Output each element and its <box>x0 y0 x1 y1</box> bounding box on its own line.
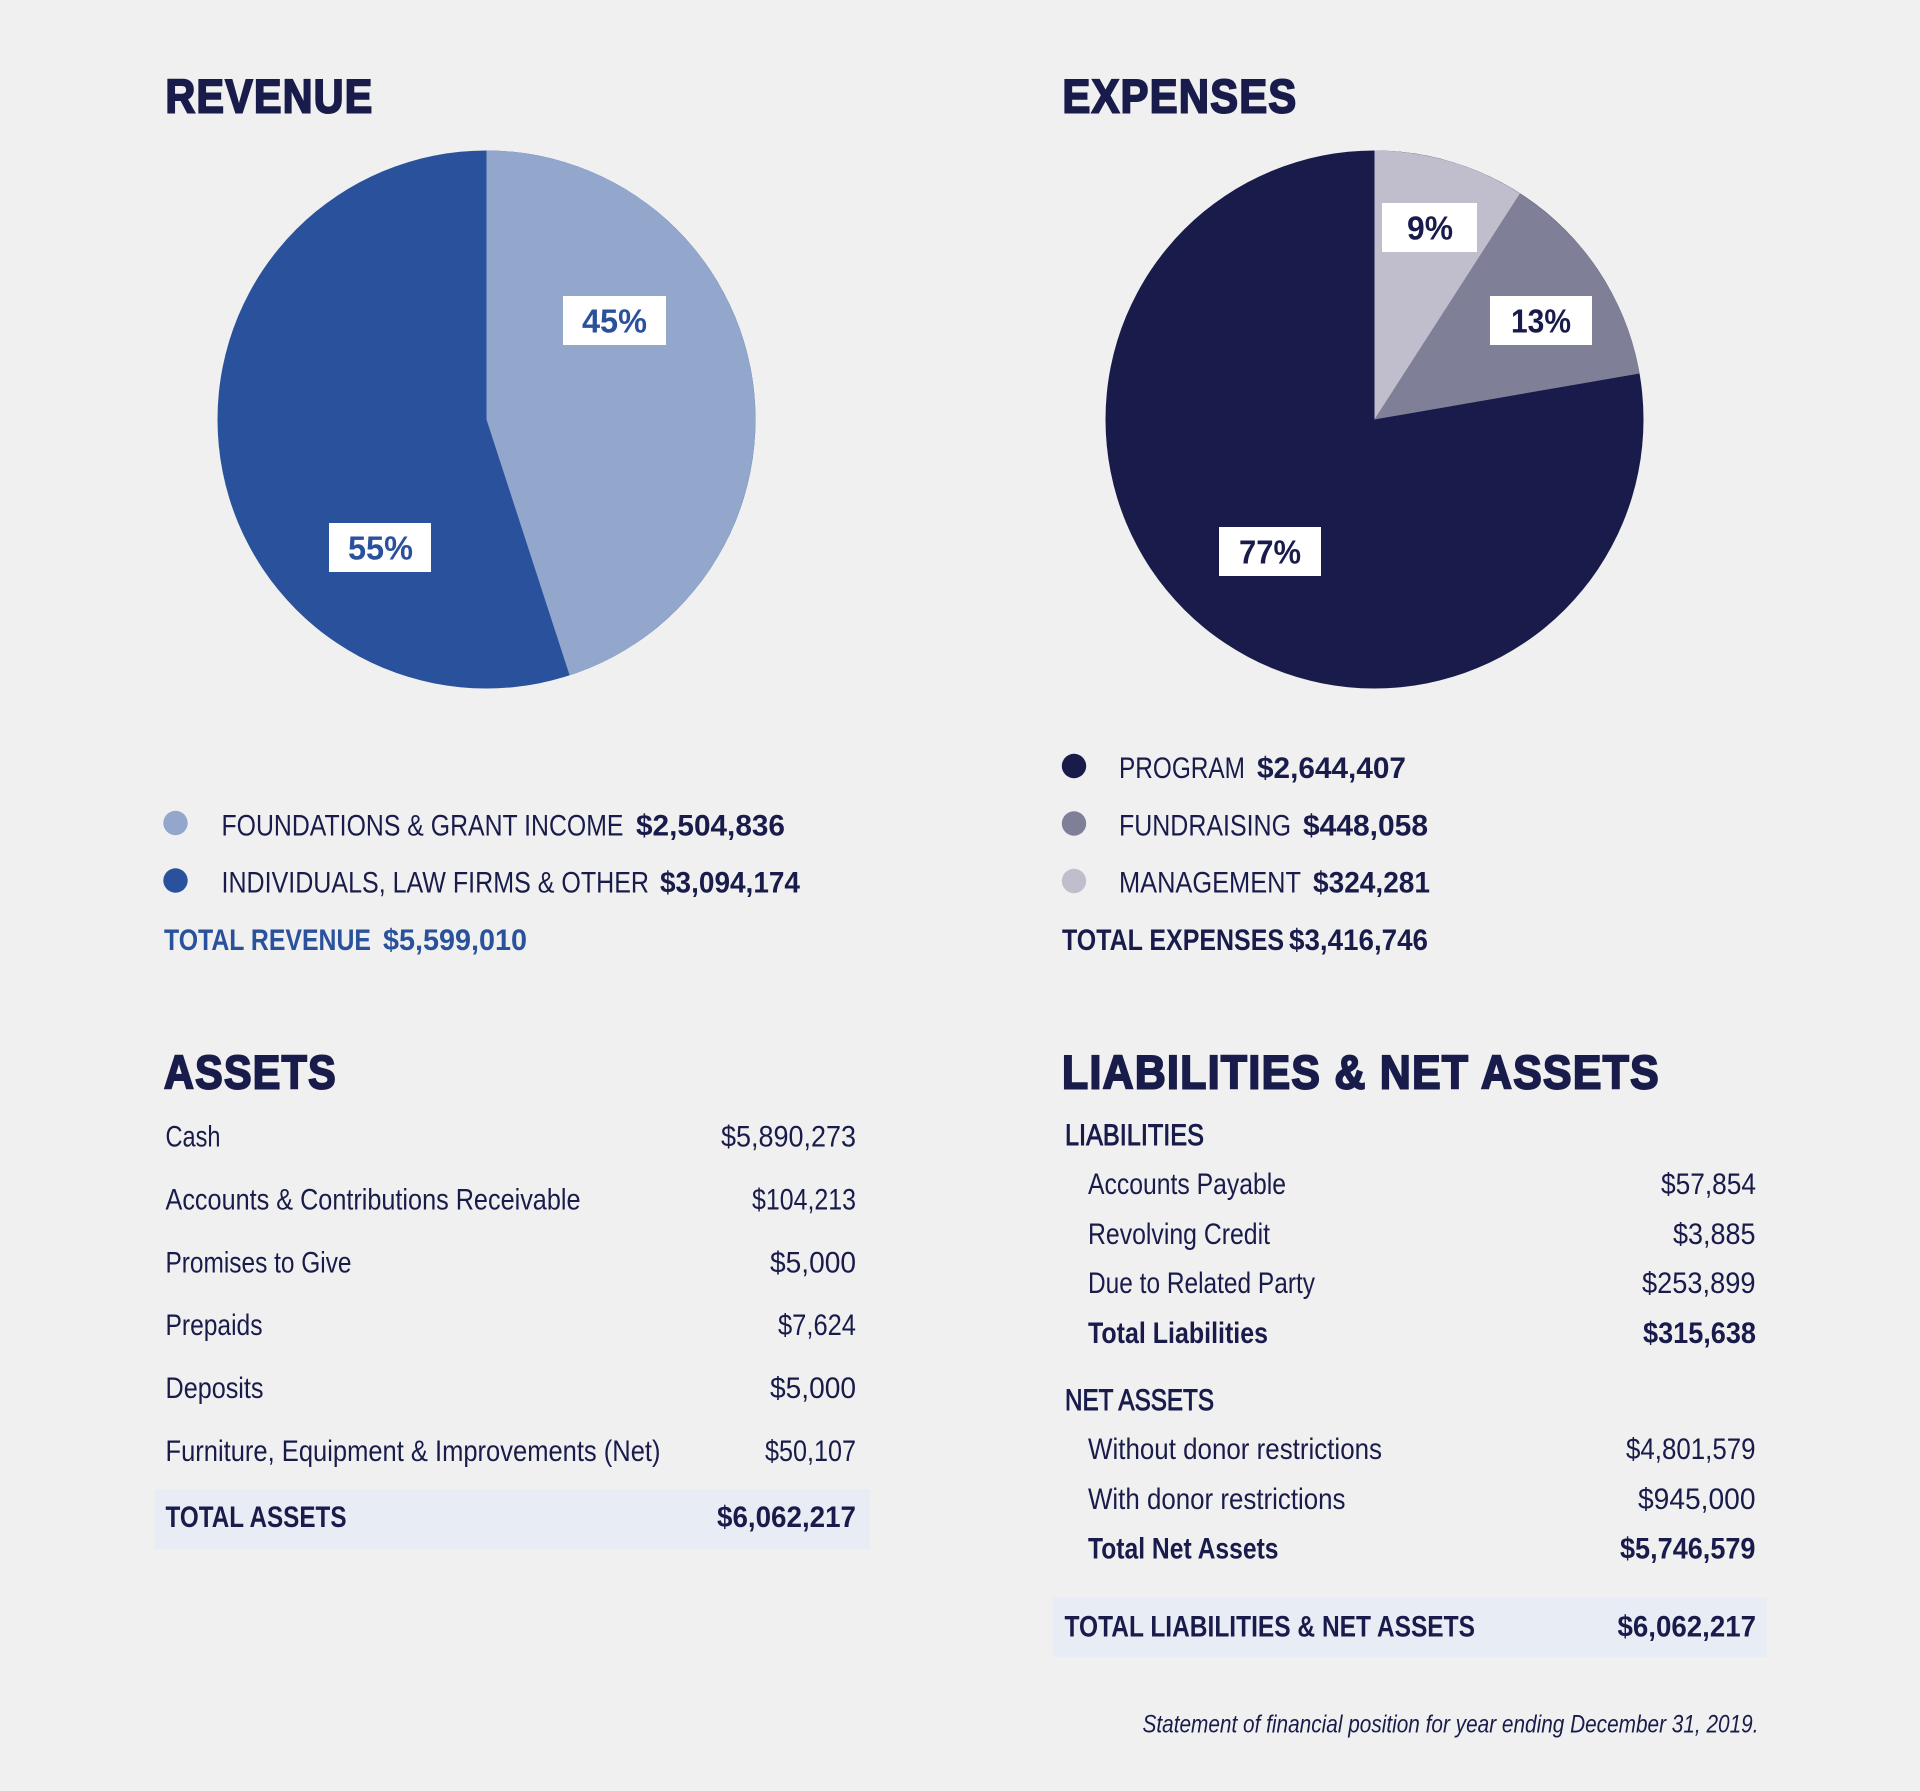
row: total net assets <box>1088 1532 1756 1566</box>
label: 55%: 55% <box>348 530 413 566</box>
row: deposits: $5,000 <box>770 1372 856 1405</box>
row: accounts payable: $57,854 <box>1661 1168 1756 1201</box>
subheading: net assets: NET ASSETS <box>1065 1384 1214 1417</box>
row: accounts and contributions receivable: Accounts & Contributions Receivable <box>166 1184 580 1216</box>
label: 55% <box>329 523 431 572</box>
footnote: Statement of financial position for year ending December 31, 2019. <box>1142 1710 1758 1738</box>
legend: revenue <box>163 810 800 957</box>
row: with donor restrictions <box>1088 1483 1756 1516</box>
legend item: fundraising: FUNDRAISING <box>1119 810 1291 842</box>
row: cash: $5,890,273 <box>721 1120 856 1154</box>
heading: revenue: REVENUE <box>166 70 374 122</box>
row: promises to give: $5,000 <box>770 1246 856 1280</box>
row: furniture, equipment and improvements: Furniture, Equipment & Improvements (Net) <box>166 1435 660 1468</box>
legend item: management: $324,281 <box>1313 866 1430 900</box>
legend item: management <box>1062 866 1430 900</box>
row: with donor restrictions: With donor restrictions <box>1088 1483 1346 1516</box>
legend total: revenue <box>164 924 527 957</box>
row: total net assets: Total Net Assets <box>1088 1532 1278 1566</box>
row: due to related party: $253,899 <box>1642 1267 1756 1300</box>
legend item: fundraising <box>1062 810 1428 842</box>
panel: revenue <box>163 70 800 957</box>
row: accounts payable <box>1088 1168 1756 1201</box>
legend item: individuals, law firms and other: $3,094,174 <box>660 866 800 900</box>
row: cash: Cash <box>166 1120 220 1154</box>
label: 9% <box>1382 203 1477 252</box>
row: deposits <box>166 1372 856 1405</box>
legend item: foundations and grant income: $2,504,836 <box>636 810 785 842</box>
total row: total liabilities and net assets: $6,062,217 <box>1618 1610 1756 1644</box>
legend: expenses <box>1062 752 1430 957</box>
label: 13%: 13% <box>1511 302 1571 340</box>
row: promises to give <box>166 1246 856 1280</box>
row: promises to give: Promises to Give <box>166 1246 352 1280</box>
label: 45% <box>563 296 666 345</box>
heading: expenses: EXPENSES <box>1062 70 1298 122</box>
legend item: individuals, law firms and other: INDIVIDUALS, LAW FIRMS & OTHER <box>222 866 649 900</box>
row: due to related party: Due to Related Party <box>1088 1267 1315 1300</box>
row: total liabilities: Total Liabilities <box>1088 1317 1268 1350</box>
row: revolving credit: Revolving Credit <box>1088 1218 1271 1251</box>
row: with donor restrictions: $945,000 <box>1638 1483 1756 1516</box>
heading: assets: ASSETS <box>164 1046 337 1098</box>
row: without donor restrictions: $4,801,579 <box>1626 1433 1756 1466</box>
row: revolving credit: $3,885 <box>1673 1218 1756 1251</box>
row: deposits: Deposits <box>166 1372 264 1405</box>
legend item: program: $2,644,407 <box>1257 752 1406 785</box>
row: due to related party <box>1088 1267 1756 1300</box>
total row: total assets <box>154 1489 870 1549</box>
pie chart: revenue <box>218 150 756 688</box>
legend item: fundraising: $448,058 <box>1303 810 1428 842</box>
legend total: expenses: $3,416,746 <box>1289 924 1428 957</box>
panel: expenses <box>1062 70 1644 957</box>
row: furniture, equipment and improvements: $50,107 <box>765 1435 856 1468</box>
row: cash <box>166 1120 856 1154</box>
legend item: program <box>1062 752 1406 785</box>
row: total net assets: $5,746,579 <box>1620 1532 1756 1566</box>
legend item: management: MANAGEMENT <box>1119 866 1301 900</box>
row: prepaids <box>166 1309 856 1342</box>
total row: total assets: TOTAL ASSETS <box>166 1501 346 1534</box>
legend item: foundations and grant income: FOUNDATIONS & GRANT INCOME <box>222 810 624 842</box>
total row: total liabilities and net assets: TOTAL LIABILITIES & NET ASSETS <box>1064 1610 1475 1644</box>
row: without donor restrictions <box>1088 1433 1756 1466</box>
label: 77% <box>1219 527 1321 576</box>
legend total: revenue: TOTAL REVENUE <box>164 924 371 957</box>
label: 13% <box>1490 296 1592 345</box>
panel: liabilities and net assets <box>1052 1046 1767 1657</box>
row: without donor restrictions: Without donor restrictions <box>1088 1433 1382 1466</box>
row: accounts payable: Accounts Payable <box>1088 1168 1286 1201</box>
row: total liabilities: $315,638 <box>1643 1317 1756 1350</box>
subheading: liabilities: LIABILITIES <box>1065 1119 1204 1152</box>
legend total: revenue: $5,599,010 <box>383 924 527 957</box>
pie chart: expenses <box>1106 150 1644 688</box>
total row: total assets: $6,062,217 <box>717 1501 856 1534</box>
total row: total liabilities and net assets <box>1052 1597 1767 1657</box>
legend item: program: PROGRAM <box>1119 752 1245 785</box>
label: 77%: 77% <box>1239 534 1301 570</box>
panel: assets <box>154 1046 870 1549</box>
row: revolving credit <box>1088 1218 1756 1251</box>
label: 9%: 9% <box>1407 210 1453 246</box>
legend total: expenses: TOTAL EXPENSES <box>1062 924 1284 957</box>
row: prepaids: Prepaids <box>166 1309 262 1342</box>
row: total liabilities <box>1088 1317 1756 1350</box>
heading: liabilities and net assets: LIABILITIES & NET ASSETS <box>1062 1046 1660 1098</box>
label: 45%: 45% <box>582 302 647 340</box>
row: accounts and contributions receivable: $104,213 <box>752 1184 856 1216</box>
row: prepaids: $7,624 <box>778 1309 856 1342</box>
